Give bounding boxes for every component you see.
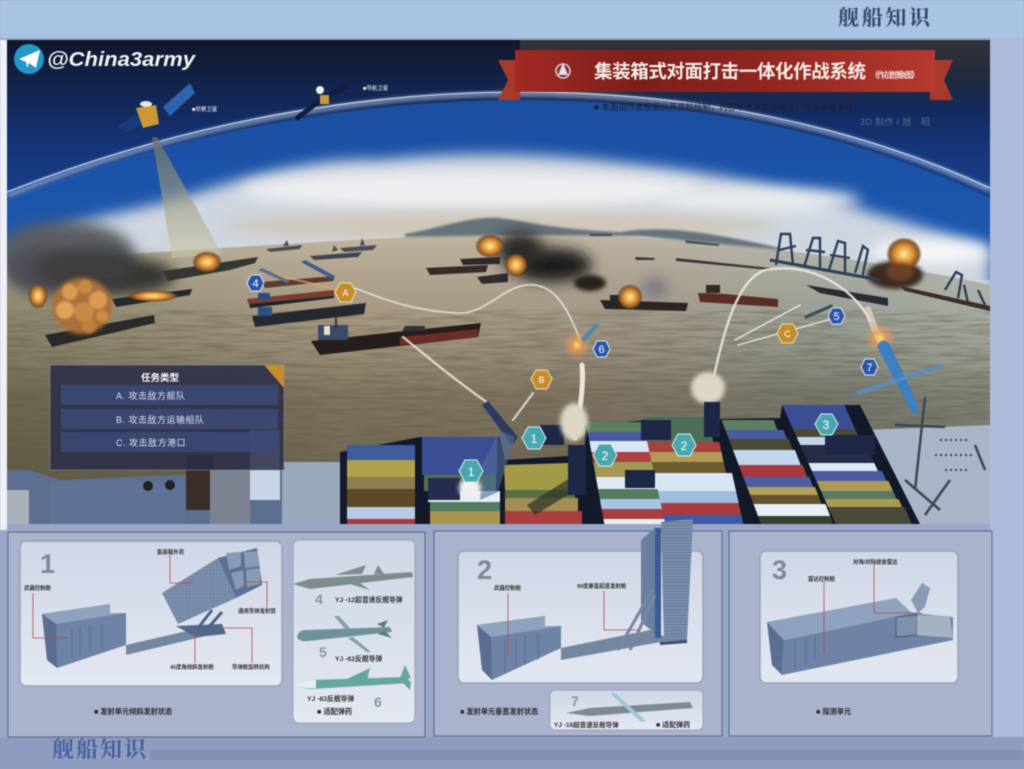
- card: detection unit diagram: [760, 551, 958, 683]
- caption: ■ 发射单元垂直发射状态: [460, 707, 539, 716]
- mission A: A. 攻击敌方舰队: [116, 390, 186, 401]
- badge: 6: [593, 341, 610, 357]
- card: detection unit diagram: 3: [772, 555, 787, 585]
- title ribbon: [498, 50, 953, 100]
- card: missile 7: YJ -18超音速反舰导弹: [554, 720, 619, 729]
- missile 5: YJ -62反舰导弹: [335, 654, 382, 663]
- mission B: [61, 409, 278, 429]
- masthead bottom left: 舰船知识: [52, 733, 148, 764]
- card: inclined launcher diagram: [20, 541, 282, 686]
- missile 6: [298, 665, 411, 710]
- badge: C: [777, 324, 798, 343]
- clouds: [30, 155, 990, 295]
- callouts: 武器控制舱: [24, 584, 52, 592]
- mission C: [61, 432, 278, 452]
- dark hull channel: [340, 405, 920, 524]
- callouts: [494, 582, 640, 655]
- badge: C: C: [784, 329, 791, 339]
- badge: 5: [828, 308, 845, 324]
- transport ships: [262, 276, 335, 288]
- label: surveillance satellite: ■侦察卫星: [192, 105, 218, 113]
- navigation satellite: [296, 86, 347, 119]
- control container: [42, 604, 222, 668]
- ribbon emblem: [556, 63, 570, 78]
- sea: [6, 234, 990, 481]
- missile 4: [293, 565, 413, 607]
- missile 6: YJ -83反舰导弹: [307, 694, 354, 703]
- card: missile 7: ■ 适配弹药: [656, 720, 690, 729]
- badge: 6: 6: [598, 344, 605, 356]
- mission B: B. 攻击敌方运输船队: [116, 414, 205, 425]
- badge: 1: 1: [531, 432, 538, 446]
- missile trails: [262, 268, 880, 438]
- disclaimer note: ■ 本画由作者根据公开资料绘制，内容不代表本刊观点，仅供读者参考。: [594, 102, 862, 112]
- title text: 集装箱式对面打击一体化作战系统: [594, 61, 866, 82]
- caption: ■ 发射单元倾斜发射状态: [94, 707, 173, 716]
- callouts: 对海/对陆搜索雷达: [853, 558, 898, 566]
- missile 4: YJ -12超音速反舰导弹: [335, 595, 403, 604]
- badge: B: B: [538, 375, 545, 385]
- port cranes: [770, 234, 985, 305]
- fleet: [45, 234, 990, 355]
- radar container: [767, 583, 953, 675]
- launch plume and glows: [563, 322, 896, 404]
- telegram badge: @China3army: [47, 49, 196, 71]
- caption: adapted munitions: ■ 适配弹药: [317, 707, 352, 716]
- badge: 2: [593, 444, 617, 466]
- badge: A: A: [342, 288, 349, 298]
- badge: 2: 2: [681, 439, 688, 453]
- caption: ■ 探测单元: [816, 707, 851, 716]
- mission A: [61, 385, 278, 405]
- missile 7: [877, 341, 918, 415]
- badge: 7: 7: [866, 362, 873, 374]
- badge: 1: [459, 460, 483, 482]
- masthead top right: 舰船知识: [838, 2, 932, 32]
- earth limb arc: [6, 89, 991, 248]
- explosions: [28, 234, 922, 334]
- satellite beam: [152, 137, 222, 258]
- title tag: （作战想象图）: [870, 70, 920, 80]
- badge: 7: [861, 359, 878, 375]
- surveillance satellite: [118, 83, 195, 133]
- badge: B: [531, 370, 552, 389]
- badge: 2: [672, 434, 696, 456]
- vertical launcher: [618, 519, 693, 650]
- container stack f: [722, 420, 833, 524]
- mid distance: [426, 265, 488, 275]
- card: missile 7: 7: [571, 693, 579, 709]
- heading: mission types: 任务类型: [141, 372, 179, 384]
- anti-ship missiles in flight: [258, 260, 943, 415]
- badge: 1: [522, 427, 546, 449]
- inclined launcher: [162, 548, 262, 637]
- container stack g: [782, 405, 912, 524]
- container stack e: [642, 417, 743, 524]
- panel: launch unit inclined: [8, 532, 425, 737]
- badge: 3: [815, 414, 838, 435]
- telegram badge: [14, 44, 196, 74]
- panel: mission types: [50, 365, 284, 470]
- callouts: 导弹舱旋转机构: [232, 663, 270, 671]
- badge: 3: 3: [823, 418, 830, 432]
- badge: 4: 4: [252, 278, 259, 290]
- callouts: 90度垂直起竖发射舱: [577, 582, 627, 590]
- badge: A: [335, 283, 356, 302]
- label: navigation satellite: ■导航卫星: [363, 84, 389, 92]
- card: missiles: [293, 540, 415, 723]
- container stack b: [422, 437, 500, 524]
- badge: 1: 1: [468, 465, 475, 479]
- target warships left: [45, 315, 155, 347]
- missile 4: 4: [315, 591, 323, 607]
- callouts: 通用导弹发射筒: [238, 607, 276, 615]
- missile 5: [297, 616, 392, 663]
- launch plumes over deck: [459, 403, 588, 498]
- panel: launch unit vertical: [434, 519, 722, 736]
- main battle illustration: [0, 40, 990, 524]
- sky: [7, 40, 990, 280]
- distant mountains: [405, 218, 780, 250]
- badge: 4: [247, 275, 264, 291]
- ship deck right: [860, 397, 990, 524]
- container stack c: [504, 463, 582, 524]
- smoke clouds: [0, 221, 923, 298]
- ship bow and deck left: [7, 430, 345, 524]
- control container: [477, 616, 672, 680]
- credit: 3D 制作 / 旭 昭: [860, 116, 930, 127]
- callouts: 雷达控制舱: [808, 575, 836, 583]
- card: vertical launcher diagram: 2: [477, 555, 492, 585]
- callouts: 武器控制舱: [494, 584, 522, 592]
- callouts: [24, 548, 276, 671]
- missile 5: 5: [319, 644, 327, 660]
- card: inclined launcher diagram: 1: [40, 549, 55, 579]
- mission C: C. 攻击敌方港口: [116, 437, 186, 448]
- launchers on deck: [480, 401, 875, 500]
- callouts: 45度角倾斜发射舱: [170, 663, 214, 671]
- container stack a: [347, 445, 415, 524]
- dark top-right backdrop: [520, 40, 990, 92]
- callouts: [808, 558, 922, 653]
- badge: 5: 5: [833, 311, 840, 323]
- card: missile 7: [550, 690, 703, 730]
- missile 6: 6: [374, 694, 382, 710]
- container stack d: [586, 422, 672, 524]
- panel: detection unit: [729, 531, 992, 736]
- card: vertical launcher diagram: [458, 519, 703, 683]
- badge: 2: 2: [602, 449, 609, 463]
- callouts: 集装箱外壳: [157, 548, 185, 556]
